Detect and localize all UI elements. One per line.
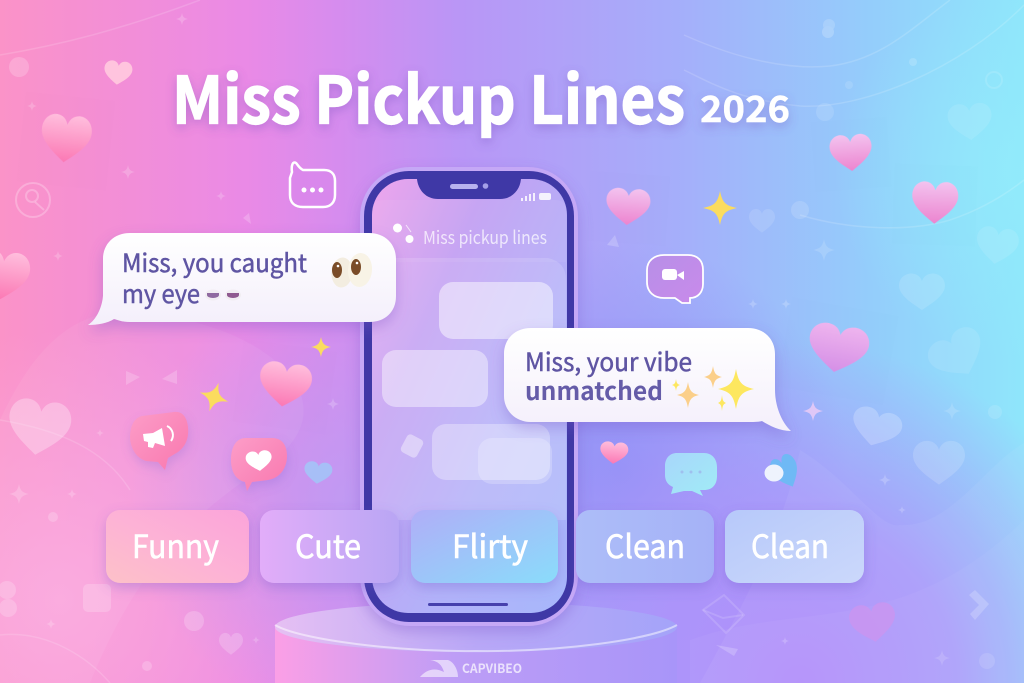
speech bubble: right [504, 328, 791, 431]
speech bubble: left [88, 233, 396, 325]
chat panel [372, 258, 566, 520]
chip: Flirty [411, 510, 558, 583]
chip: Funny [106, 510, 249, 583]
icon: lilac sparkle [803, 401, 823, 421]
app header panel [372, 200, 566, 262]
icon: small eyes emoji [205, 290, 241, 300]
phone bezel [364, 171, 574, 622]
icon: megaphone bubble [130, 412, 188, 470]
background outlined icons [16, 72, 1002, 633]
chip: Clean: Clean [605, 522, 685, 568]
message placeholder 4 [478, 438, 552, 484]
speech text: left: my eye [122, 275, 200, 311]
speech text: right: Miss, your vibe [525, 343, 692, 379]
icon: dot and blue heart [764, 451, 805, 492]
small tilted tile [399, 433, 425, 459]
speech text: left: Miss, you caught [122, 244, 308, 280]
phone screen [372, 179, 567, 613]
chip: Clean [576, 510, 714, 583]
title: 2026 [700, 81, 790, 133]
title: Miss Pickup Lines [172, 48, 685, 142]
icon: outlined chat bubble [290, 162, 335, 207]
capvibeo logo [420, 658, 522, 677]
notch [417, 179, 521, 199]
chip: Clean second: Clean [751, 522, 829, 568]
app header logo [393, 224, 414, 243]
icon: big eyes emoji [330, 252, 373, 288]
status icons [521, 193, 551, 201]
chip: Flirty: Flirty [452, 522, 528, 568]
message placeholder 1 [439, 282, 553, 339]
chip: Cute [260, 510, 399, 583]
message placeholder 3 [432, 424, 550, 480]
pedestal [275, 602, 677, 683]
icon: cyan chat bubble [665, 453, 717, 496]
capvibeo logo: CAPVIBEO [462, 658, 522, 677]
icon: video chat bubble [647, 255, 703, 303]
home indicator [428, 603, 508, 606]
phone body [360, 167, 578, 626]
speech text: right: unmatched [525, 372, 663, 408]
icon: sparkles emoji [672, 366, 754, 411]
app header title: Miss pickup lines [423, 224, 547, 250]
background pale hearts [5, 102, 1020, 485]
speech text: left [122, 244, 308, 311]
speech text: right [525, 343, 692, 408]
chip: Clean second [725, 510, 864, 583]
icon: heart bubble [231, 438, 287, 491]
icon: yellow sparkles [195, 191, 737, 416]
phone [360, 167, 578, 626]
chip: Cute: Cute [295, 522, 361, 568]
message placeholder 2 [382, 350, 488, 407]
chip: Funny: Funny [132, 522, 219, 568]
